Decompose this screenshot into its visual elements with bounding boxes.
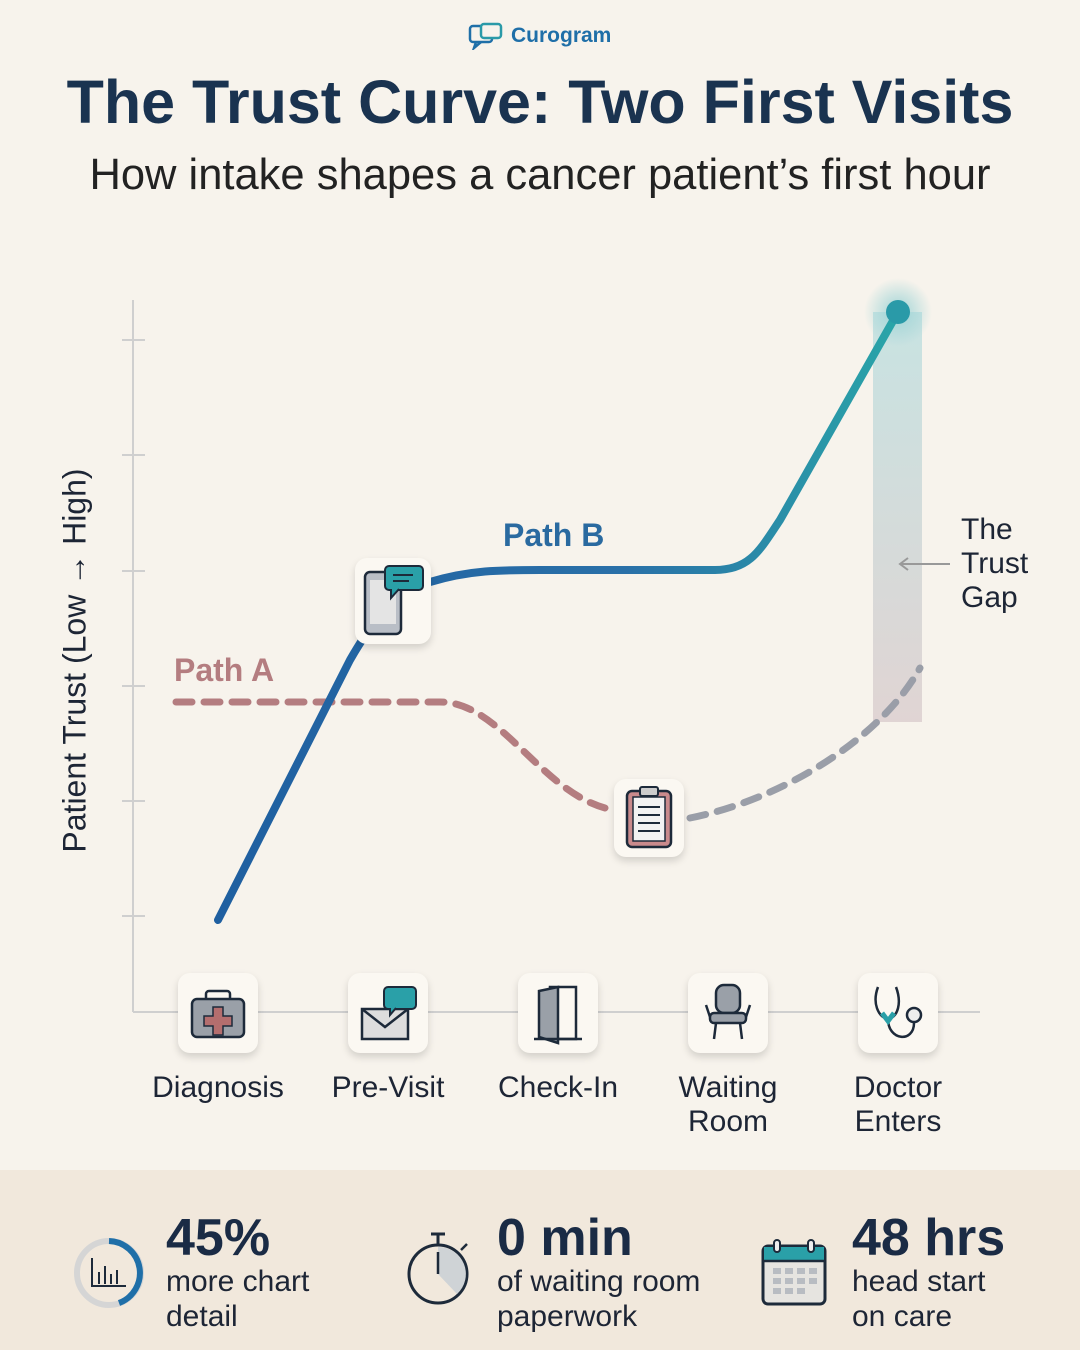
logo [468,22,611,50]
stat: 48 hrs [762,1209,1005,1333]
trust gap band [864,278,932,722]
trust gap arrow [900,558,950,570]
stats band [0,1170,1080,1350]
stage: doctor enters: Doctor [854,1071,942,1104]
stage: diagnosis [152,981,284,1104]
stage: pre-visit: Pre-Visit [332,1071,444,1104]
stage: check-in [498,981,618,1104]
stat: 45% [74,1209,310,1333]
stat: 0 min: 0 min [497,1209,633,1267]
subtitle: How intake shapes a cancer patient’s first hour [89,151,991,199]
stat: 45%: more chart [166,1265,309,1298]
icon: clipboard [614,779,684,857]
stat: 0 min [408,1209,700,1333]
stage: waiting room [678,981,777,1138]
label Path A: Path A [174,652,274,688]
label trust gap: Trust [961,547,1028,580]
path A dashed [176,668,920,818]
stat: 45%: detail [166,1300,238,1333]
stat: 0 min: of waiting room [497,1265,700,1298]
stat: 48 hrs: 48 hrs [852,1209,1005,1267]
stage: doctor enters [854,981,942,1138]
stage: check-in: Check-In [498,1071,618,1104]
stage: doctor enters: Enters [855,1105,941,1138]
stage: pre-visit [332,981,444,1104]
label trust gap [961,513,1028,614]
logo: Curogram [511,24,611,47]
label trust gap: Gap [961,581,1018,614]
stat: 48 hrs: on care [852,1300,952,1333]
stat: 0 min: paperwork [497,1300,637,1333]
stage: waiting room: Room [688,1105,768,1138]
stat: 48 hrs: head start [852,1265,985,1298]
stage: waiting room: Waiting [679,1071,777,1104]
label trust gap: The [961,513,1013,546]
title: The Trust Curve: Two First Visits [67,68,1013,136]
stat: 45%: 45% [166,1209,270,1267]
y-axis label: Patient Trust (Low → High) [56,468,92,853]
icon: phone [355,558,431,644]
stage: diagnosis: Diagnosis [152,1071,284,1104]
label Path B: Path B [503,517,604,553]
path B [218,312,898,920]
